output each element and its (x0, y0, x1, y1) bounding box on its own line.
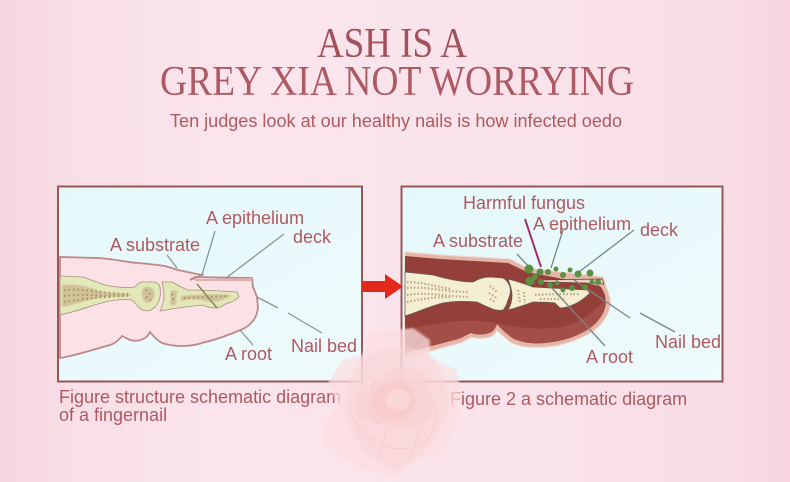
panel: infected nail: deck (640, 220, 679, 240)
panel: healthy nail structure: A substrate (110, 235, 200, 255)
panel 1 background (58, 186, 362, 382)
labels: A epithelium (206, 208, 304, 228)
panel: infected nail: A root (586, 347, 633, 367)
panel: infected nail: A epithelium (533, 214, 631, 234)
healthy finger illustration (60, 257, 258, 358)
title: GREY XIA NOT WORRYING (160, 59, 634, 105)
panel: healthy nail structure: Nail bed (291, 336, 357, 356)
labels: Harmful fungus (463, 193, 585, 213)
panel 2 background (402, 186, 722, 382)
caption: figure 1 (59, 387, 341, 425)
panel: healthy nail structure: A root (225, 344, 272, 364)
title: ASH IS A (317, 21, 468, 67)
infected finger illustration (405, 252, 610, 358)
panel: healthy nail structure (58, 186, 362, 382)
panel: infected nail: A substrate (433, 231, 523, 251)
caption: figure 1: of a fingernail (59, 405, 167, 425)
rose decoration (323, 328, 460, 477)
caption: figure 1: Figure structure schematic diagram (59, 387, 341, 407)
caption: figure 2: Figure 2 a schematic diagram (450, 389, 687, 409)
subtitle: Ten judges look at our healthy nails is how infected oedo (170, 111, 622, 131)
panel: infected nail: Nail bed (655, 332, 721, 352)
panel: healthy nail structure: deck (293, 227, 332, 247)
leader lines (167, 231, 322, 345)
fungus pointer (525, 219, 541, 267)
panel: infected nail (402, 186, 722, 382)
arrow (362, 274, 403, 299)
title (160, 21, 634, 105)
leader lines (517, 230, 675, 346)
fungus dots (524, 264, 601, 292)
